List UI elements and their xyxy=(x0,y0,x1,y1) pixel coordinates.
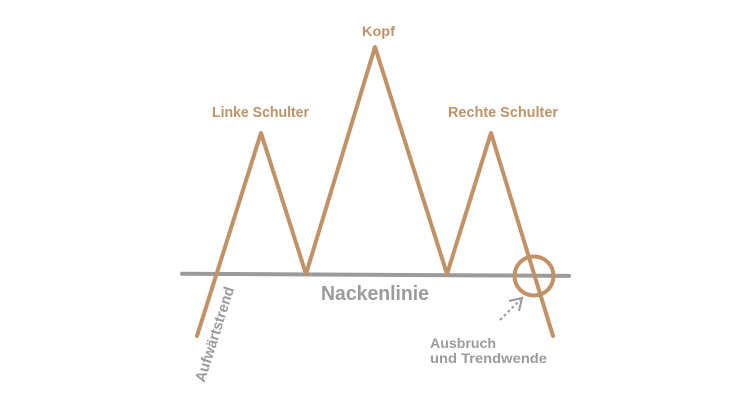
dotted arrow xyxy=(500,298,522,320)
label: Nackenlinie: Nackenlinie xyxy=(321,283,429,305)
neckline xyxy=(182,274,569,276)
breakout circle xyxy=(514,256,554,296)
label: Ausbruch und Trendwende: Ausbruch xyxy=(430,335,496,351)
label: Aufwärtstrend: Aufwärtstrend xyxy=(192,285,238,384)
label: Rechte Schulter: Rechte Schulter xyxy=(448,105,558,121)
label: Linke Schulter: Linke Schulter xyxy=(212,105,309,121)
label: Ausbruch und Trendwende: und Trendwende xyxy=(430,350,547,366)
price line xyxy=(197,47,553,336)
label: Ausbruch und Trendwende xyxy=(430,335,547,366)
label: Kopf: Kopf xyxy=(362,23,395,39)
